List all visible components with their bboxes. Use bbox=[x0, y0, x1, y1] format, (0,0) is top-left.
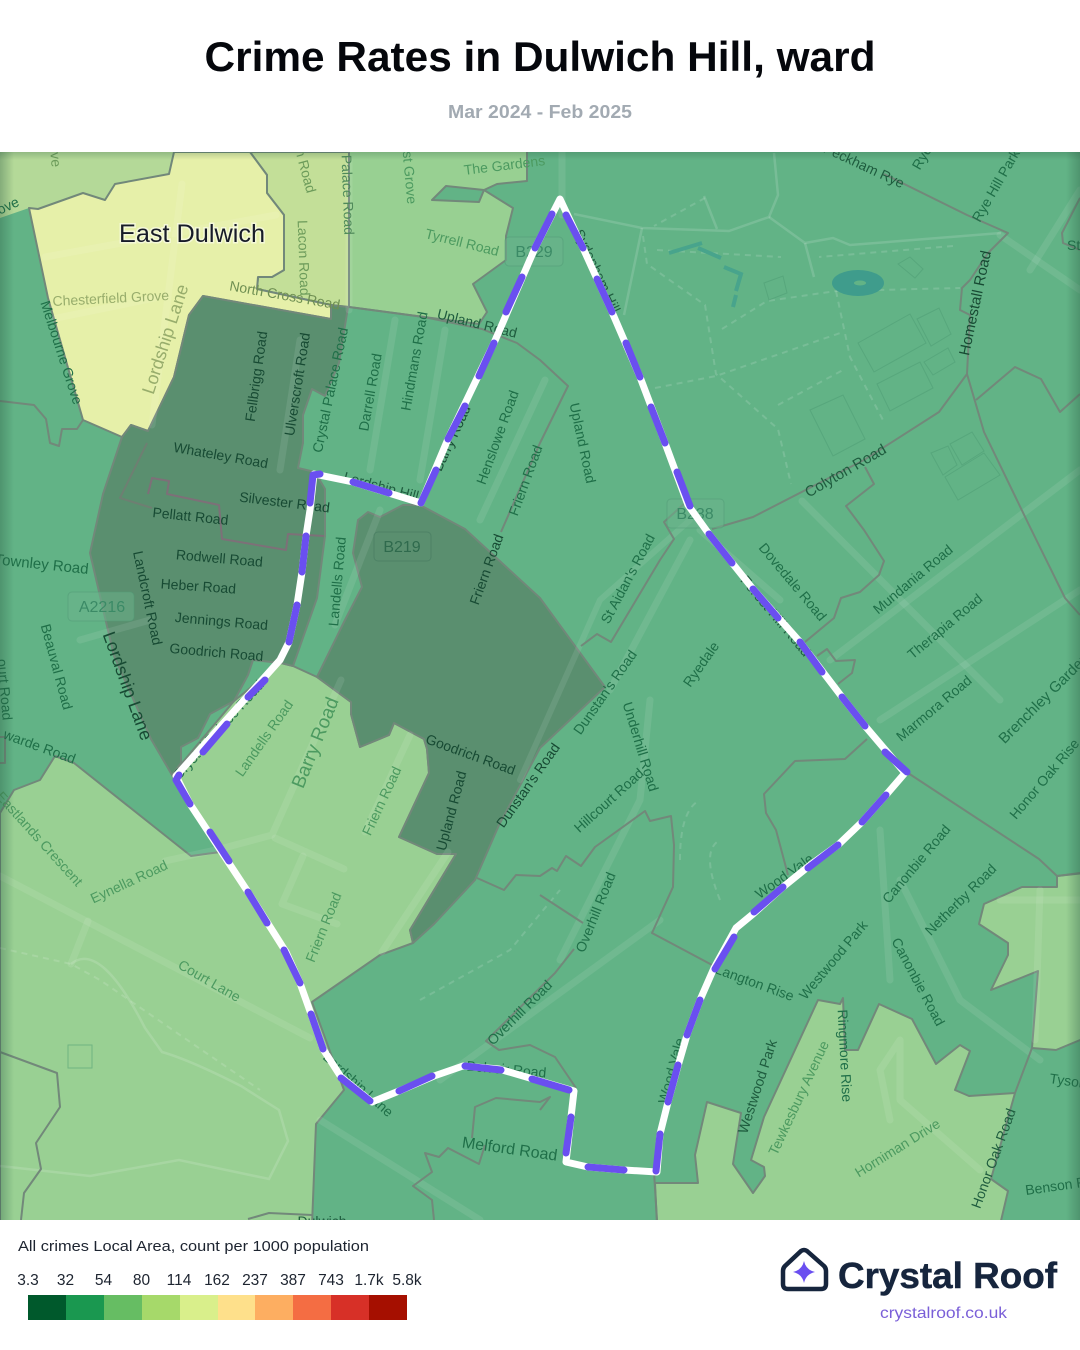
road labels: Landcroft Road bbox=[130, 549, 166, 646]
road labels: Rodwell Road bbox=[175, 546, 264, 570]
road labels: Eynella Road bbox=[88, 857, 170, 906]
region: East Dulwich yellow bbox=[29, 152, 331, 437]
road labels: St bbox=[1067, 237, 1080, 253]
road labels: Canonbie Road bbox=[889, 935, 948, 1028]
sub-area boundaries bbox=[0, 174, 1080, 1220]
road labels: Palace Road bbox=[339, 154, 357, 235]
road labels: Westwood Park bbox=[796, 916, 871, 1002]
road labels: Langton Rise bbox=[713, 961, 796, 1004]
region: top-left pale band bbox=[0, 152, 176, 218]
legend tick labels: 80 bbox=[133, 1272, 150, 1289]
title: Crime Rates in Dulwich Hill, ward bbox=[204, 33, 876, 80]
road labels: Wood Vale bbox=[752, 850, 816, 902]
subtitle: date range: Mar 2024 - Feb 2025 bbox=[448, 102, 632, 122]
region: dark west bbox=[90, 296, 348, 775]
shield: B238: B238 bbox=[676, 506, 714, 523]
shield: A2216 bbox=[68, 592, 134, 621]
region: light green south-west bbox=[0, 663, 456, 1225]
road labels: Landells Road bbox=[325, 536, 349, 627]
region: light green Horniman bbox=[655, 998, 1015, 1225]
road labels: Fellbrigg Road bbox=[242, 330, 270, 423]
road labels: Upland Road bbox=[436, 305, 519, 341]
road labels: n Road bbox=[292, 147, 319, 195]
road labels: Silvester Road bbox=[238, 489, 331, 516]
road labels: Lordship Lane bbox=[320, 1049, 397, 1120]
ward boundary bbox=[176, 199, 907, 1172]
road labels: Colyton Road bbox=[802, 441, 889, 501]
road labels: Friern Road bbox=[302, 890, 345, 964]
legend tick labels: 1.7k bbox=[354, 1272, 384, 1289]
road labels: Chesterfield Grove bbox=[52, 287, 170, 309]
shield: B219 bbox=[374, 532, 431, 561]
legend tick labels: 162 bbox=[204, 1272, 230, 1289]
road labels: Goodrich Road bbox=[424, 731, 518, 778]
road labels: Melbourne Grove bbox=[37, 299, 86, 407]
legend tick labels: 743 bbox=[318, 1272, 344, 1289]
park footpaths bbox=[0, 153, 1001, 1179]
road labels: Canonbie Road bbox=[879, 821, 954, 906]
region: pale green north of ward bbox=[250, 152, 349, 307]
legend tick labels bbox=[17, 1272, 422, 1289]
road labels: Forest Hill Road bbox=[737, 572, 814, 659]
legend tick labels: 237 bbox=[242, 1272, 268, 1289]
road shields bbox=[68, 237, 724, 621]
road labels: Dovedale Road bbox=[756, 540, 830, 624]
road labels: Tewkesbury Avenue bbox=[765, 1038, 832, 1158]
legend tick labels: 32 bbox=[57, 1272, 74, 1289]
road labels: Upland Road bbox=[567, 401, 599, 485]
road labels: Netherby Road bbox=[922, 861, 999, 938]
road labels: Ringmore Rise bbox=[835, 1009, 855, 1103]
road labels: The Gardens bbox=[463, 152, 546, 178]
park plots bbox=[68, 257, 1000, 1068]
legend tick labels: 114 bbox=[167, 1272, 192, 1289]
road labels: Lordship Hill bbox=[342, 468, 421, 504]
road labels: Pellatt Road bbox=[152, 504, 229, 528]
road labels: Therapia Road bbox=[904, 590, 985, 662]
road labels: Sydenham Hill bbox=[571, 227, 624, 315]
road labels: Lacon Road bbox=[295, 220, 313, 296]
road labels: Lordship Lane bbox=[99, 629, 157, 743]
region: light green north bbox=[349, 150, 527, 324]
legend bbox=[17, 1238, 422, 1320]
road labels: Dulwich bbox=[297, 1213, 347, 1229]
road labels: warde Road bbox=[1, 726, 78, 767]
legend title: All crimes Local Area, count per 1000 population bbox=[18, 1238, 369, 1255]
road labels: Mundania Road bbox=[870, 541, 956, 617]
legend tick labels: 387 bbox=[280, 1272, 306, 1289]
legend tick labels: 3.3 bbox=[17, 1272, 39, 1289]
road labels: Landells Road bbox=[232, 697, 296, 779]
road labels: Wood Vale bbox=[655, 1036, 688, 1105]
road labels: Peckham Rye bbox=[821, 140, 907, 191]
shield: B219: B219 bbox=[383, 539, 421, 556]
road labels: Ulverscroft Road bbox=[281, 331, 313, 437]
legend colour scale bbox=[28, 1295, 407, 1320]
road labels: Rye bbox=[909, 143, 935, 172]
road labels: ve bbox=[47, 151, 65, 168]
map base area bbox=[0, 152, 1080, 1220]
shield: B238 bbox=[667, 499, 724, 528]
road labels: Belvoir Road bbox=[466, 1058, 547, 1080]
road labels: Barry Road bbox=[429, 402, 474, 473]
shield: A2216: A2216 bbox=[79, 599, 125, 616]
road labels: Dunstan's Road bbox=[570, 647, 640, 737]
road labels: Friern Road bbox=[505, 443, 545, 518]
road labels: St Aidan's Road bbox=[597, 531, 658, 626]
road labels: Barry Road bbox=[288, 694, 344, 791]
road labels: Westwood Park bbox=[735, 1037, 780, 1135]
road labels: North Cross Road bbox=[228, 277, 341, 313]
legend tick labels: 54 bbox=[95, 1272, 112, 1289]
road labels: Rye Hill Park bbox=[969, 146, 1023, 225]
icon: house with star bbox=[783, 1250, 826, 1289]
road labels: Crystal Palace Road bbox=[309, 326, 351, 454]
road labels: Beauval Road bbox=[38, 622, 76, 711]
road labels: Lordship Lane bbox=[138, 282, 192, 396]
road labels: Darrell Road bbox=[355, 352, 385, 432]
road labels: Whateley Road bbox=[172, 439, 269, 471]
icon: park lake bbox=[669, 243, 884, 307]
road labels: Goodrich Road bbox=[169, 640, 264, 664]
logo: Crystal Roof bbox=[783, 1250, 1058, 1322]
shield: B229 bbox=[505, 237, 563, 266]
shield: B229: B229 bbox=[515, 244, 553, 261]
road labels: Friern Road bbox=[466, 532, 506, 607]
road labels: Marmora Road bbox=[893, 672, 975, 744]
road labels: Homestall Road bbox=[956, 249, 995, 357]
road labels: Dunstan's Road bbox=[493, 740, 563, 830]
road labels: Friern Road bbox=[359, 764, 404, 838]
road labels: Ryedale bbox=[680, 638, 722, 690]
road labels: Overhill Road bbox=[572, 870, 619, 954]
road network bbox=[0, 152, 1080, 1220]
road labels: Horniman Drive bbox=[852, 1115, 943, 1180]
legend tick labels: 5.8k bbox=[392, 1272, 422, 1289]
map edge shading bbox=[0, 152, 1080, 1220]
wordmark: Crystal Roof bbox=[838, 1255, 1058, 1296]
road labels: Underhill Road bbox=[620, 700, 662, 793]
road labels: Tyrrell Road bbox=[424, 225, 501, 259]
road labels: Hindmans Road bbox=[397, 310, 431, 412]
road labels: Upland Road bbox=[433, 769, 469, 852]
road labels: Melford Road bbox=[461, 1134, 558, 1165]
road labels: st Grove bbox=[400, 151, 420, 205]
road labels: Heber Road bbox=[160, 575, 237, 597]
road labels: Crystal Palace Road bbox=[170, 677, 267, 782]
road labels: Overhill Road bbox=[484, 977, 555, 1048]
road labels: Court Lane bbox=[176, 956, 244, 1005]
website: crystalroof.co.uk bbox=[880, 1305, 1008, 1322]
road labels: Honor Oak Road bbox=[968, 1106, 1019, 1210]
road labels: Henslowe Road bbox=[473, 388, 522, 486]
road labels: Hillcourt Road bbox=[571, 765, 647, 836]
region: light green east bbox=[979, 873, 1080, 1050]
region: dark central bbox=[317, 505, 605, 943]
road labels: Jennings Road bbox=[174, 609, 269, 633]
label: East Dulwich: East Dulwich bbox=[119, 220, 265, 248]
